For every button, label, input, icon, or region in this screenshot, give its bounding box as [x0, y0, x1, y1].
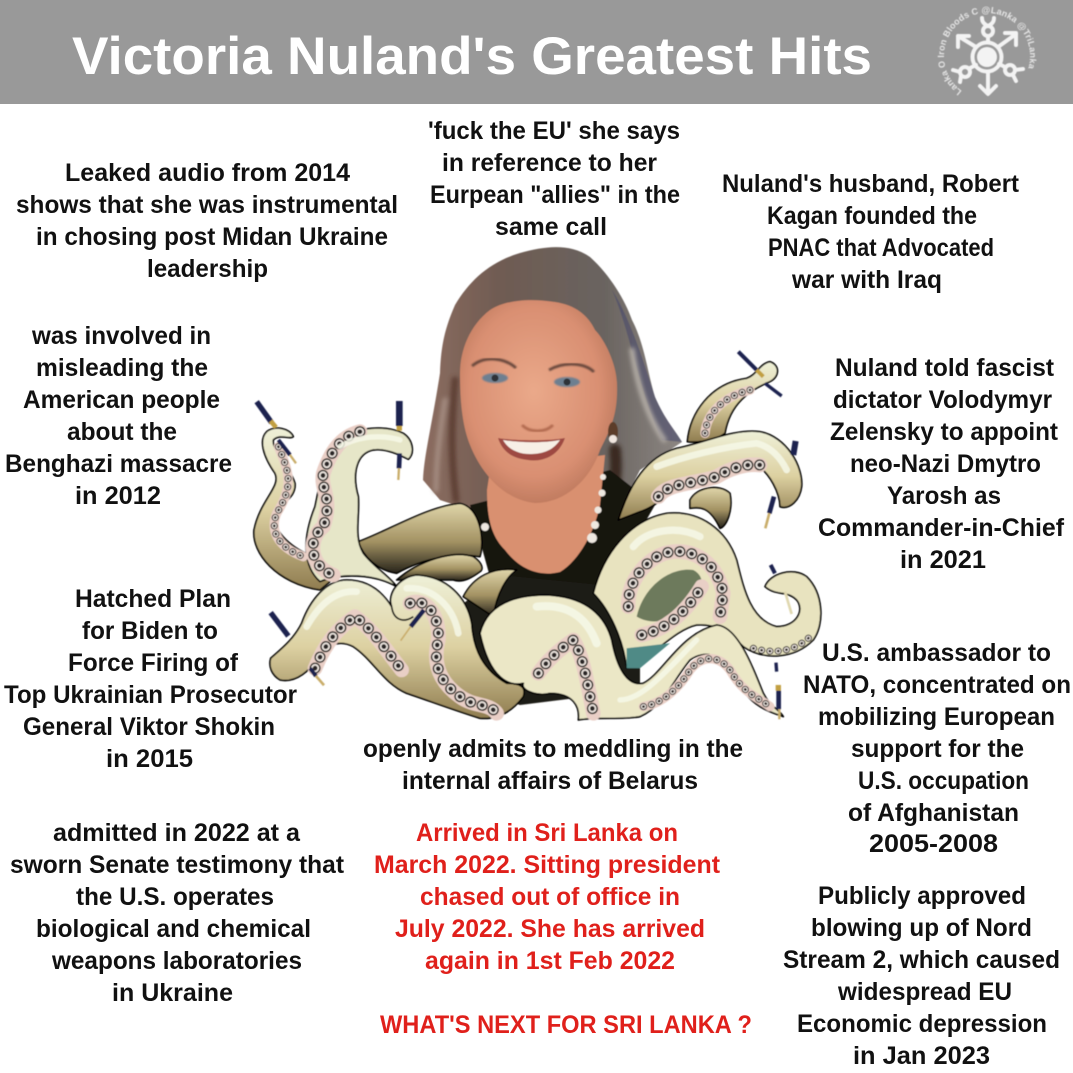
text: Zelensky: in 2021 [900, 546, 986, 574]
face [460, 300, 617, 503]
text: Benghazi: about the [67, 418, 177, 446]
text: Nord Stream: Economic depression [797, 1010, 1047, 1038]
text: Nord Stream: blowing up of Nord [811, 914, 1032, 942]
text: Zelensky: Nuland told fascist [835, 354, 1055, 382]
hair streaks [436, 350, 664, 520]
text: Senate testimony: admitted in 2022 at a [53, 819, 301, 847]
hair [423, 247, 682, 525]
title: Victoria Nuland's Greatest Hits [72, 27, 872, 86]
text: Benghazi: American people [23, 386, 220, 414]
text: Zelensky: dictator Volodymyr [833, 386, 1052, 414]
text: Benghazi [5, 322, 232, 510]
dress [470, 470, 655, 600]
text: Benghazi: was involved in [31, 322, 211, 350]
text: NATO ambassador: U.S. occupation [858, 767, 1029, 795]
text: Benghazi: Benghazi massacre [5, 450, 232, 478]
suckers [274, 432, 497, 713]
small arm [397, 555, 482, 581]
text: fuck the EU quote: same call [495, 213, 607, 241]
text: husband Robert Kagan [722, 170, 1020, 294]
pens [738, 352, 796, 719]
text: Zelensky [818, 354, 1065, 574]
red text: Sri Lanka: chased out of office in [420, 883, 680, 911]
red text: Sri Lanka: July 2022. She has arrived [395, 915, 705, 943]
far left arm [254, 428, 340, 590]
text: NATO ambassador: 2005-2008 [869, 830, 998, 858]
text: Nord Stream: widespread EU [837, 978, 1012, 1006]
text: Belarus: internal affairs of Belarus [402, 767, 698, 795]
inner shadow [637, 570, 702, 621]
text: Zelensky: neo-Nazi Dmytro [850, 450, 1041, 478]
left tentacles [254, 401, 524, 718]
suckers [538, 390, 810, 713]
text: Shokin: Hatched Plan [75, 585, 231, 613]
stem [690, 488, 731, 528]
tentacle backing [455, 575, 640, 705]
text: Zelensky: Commander-in-Chief [818, 514, 1065, 542]
text: Nord Stream: Publicly approved [818, 882, 1026, 910]
big arm [593, 513, 821, 668]
front left arm [270, 575, 524, 718]
red text: Sri Lanka: March 2022. Sitting president [374, 851, 721, 879]
text: leaked audio: shows that she was instrumental [16, 191, 398, 219]
text: fuck the EU quote: 'fuck the EU' she says [428, 117, 680, 145]
text: NATO ambassador [803, 639, 1071, 858]
text: Shokin: Force Firing of [68, 649, 239, 677]
red text: Sri Lanka: Arrived in Sri Lanka on [416, 819, 678, 847]
illustration: woman with octopus tentacles [254, 247, 821, 720]
text: Nord Stream [783, 882, 1060, 1070]
text: Zelensky: Zelensky to appoint [830, 418, 1059, 446]
text: husband Robert Kagan: Kagan founded the [767, 202, 977, 230]
text: Zelensky: Yarosh as [887, 482, 1001, 510]
text: Shokin [4, 585, 297, 773]
text: Shokin: for Biden to [82, 617, 218, 645]
text: Senate testimony: in Ukraine [112, 979, 233, 1007]
text: leaked audio: in chosing post Midan Ukraine [36, 223, 388, 251]
text: NATO ambassador: NATO, concentrated on [803, 671, 1071, 699]
text: Shokin: Top Ukrainian Prosecutor [4, 681, 297, 709]
text: Senate testimony: the U.S. operates [76, 883, 274, 911]
long arm [618, 431, 802, 520]
top arm [687, 362, 777, 442]
neck and chest [487, 455, 605, 574]
small arm two [463, 569, 517, 617]
text: Senate testimony: biological and chemical [36, 915, 311, 943]
text: Nord Stream: in Jan 2023 [853, 1042, 990, 1070]
header band [0, 0, 1073, 104]
text: Benghazi: misleading the [36, 354, 208, 382]
text: husband Robert Kagan: Nuland's husband, Robert [722, 170, 1020, 198]
text: fuck the EU quote [428, 117, 680, 241]
front arm [480, 595, 783, 720]
text: NATO ambassador: of Afghanistan [848, 799, 1019, 827]
text: Shokin: General Viktor Shokin [23, 713, 275, 741]
text: Senate testimony: sworn Senate testimony that [10, 851, 345, 879]
facial features [472, 359, 618, 543]
red text: Sri Lanka [374, 819, 752, 1039]
text: fuck the EU quote: Eurpean "allies" in the [430, 181, 680, 209]
text: leaked audio: leadership [147, 255, 268, 283]
pens [257, 401, 424, 685]
right tentacles [480, 352, 821, 720]
second arm [306, 428, 412, 587]
logo: Lanka O Iron Bloods C @Lanka @TriLanka [937, 6, 1037, 96]
text: Nord Stream: Stream 2, which caused [783, 946, 1060, 974]
text: leaked audio [16, 159, 398, 283]
text: Shokin: in 2015 [106, 745, 193, 773]
text: Benghazi: in 2012 [75, 482, 161, 510]
red text: Sri Lanka: again in 1st Feb 2022 [425, 947, 675, 975]
text: NATO ambassador: U.S. ambassador to [822, 639, 1051, 667]
text: husband Robert Kagan: PNAC that Advocated [768, 234, 994, 262]
text: Senate testimony [10, 819, 345, 1007]
text: husband Robert Kagan: war with Iraq [791, 266, 942, 294]
text: Senate testimony: weapons laboratories [51, 947, 302, 975]
back arm [358, 503, 482, 573]
text: NATO ambassador: mobilizing European [818, 703, 1055, 731]
text: fuck the EU quote: in reference to her [442, 149, 657, 177]
red text: Sri Lanka: WHAT'S NEXT FOR SRI LANKA ? [380, 1011, 752, 1039]
text: NATO ambassador: support for the [851, 735, 1024, 763]
text: Belarus [363, 735, 743, 795]
text: leaked audio: Leaked audio from 2014 [65, 159, 350, 187]
text: Belarus: openly admits to meddling in the [363, 735, 743, 763]
